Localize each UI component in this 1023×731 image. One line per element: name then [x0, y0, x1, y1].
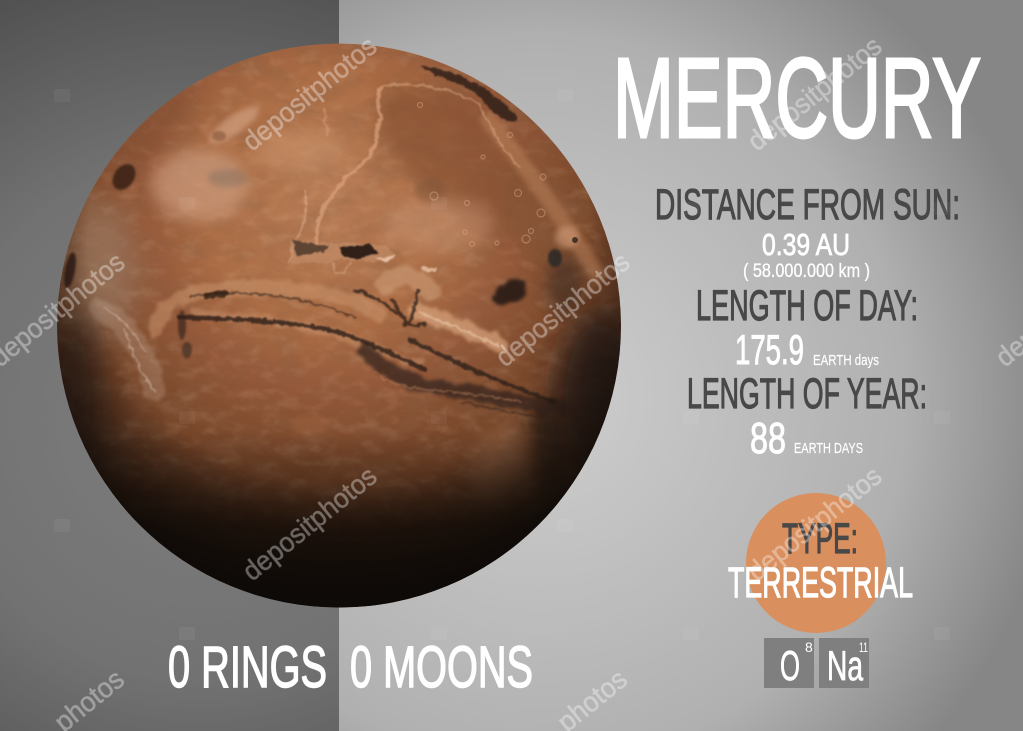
watermark: depositphotos: depositphotos [236, 30, 382, 157]
dark trough lines [178, 317, 425, 370]
type value: TERRESTRIAL [728, 559, 913, 607]
albedo regions [50, 75, 645, 540]
value: distance in AU: 0.39 AU [762, 227, 850, 262]
type badge [728, 493, 913, 633]
moons count: 0 MOONS [350, 635, 533, 700]
unit: earth days: EARTH days [813, 352, 879, 369]
watermark: depositphotos: depositphotos [741, 460, 887, 587]
element: sodium [819, 638, 869, 689]
outflow channels [289, 85, 520, 262]
unit: earth days caps: EARTH DAYS [794, 440, 863, 457]
type label: TYPE: [782, 515, 858, 563]
canyon system: Valles Marineris [100, 276, 560, 418]
pale chaos at the west end [100, 310, 155, 390]
element: oxygen: O [780, 642, 800, 689]
element: sodium: 11 [859, 639, 868, 655]
orange circle [746, 493, 886, 633]
planet image [50, 43, 645, 610]
background: right panel [339, 0, 1023, 731]
watermark camera icons [54, 89, 950, 640]
value: distance in km: ( 58.000.000 km ) [743, 261, 870, 282]
element: oxygen [764, 638, 814, 689]
watermark: depositphotos: depositphotos [236, 460, 382, 587]
value: length of day: 175.9 [735, 326, 804, 373]
stats block [655, 181, 960, 463]
rings count: 0 RINGS [168, 635, 327, 700]
watermark: depositphotos: depositphotos [489, 246, 635, 373]
dark volcanic patches [62, 66, 579, 358]
background: left panel [0, 0, 339, 731]
value: length of year: 88 [750, 414, 786, 463]
watermark: depositphotos: depositphotos [741, 30, 887, 157]
crater field [418, 102, 546, 246]
upper canyon: Echus and Hebes [290, 240, 437, 273]
element: sodium: Na [827, 642, 863, 689]
element: oxygen: 8 [805, 639, 813, 655]
